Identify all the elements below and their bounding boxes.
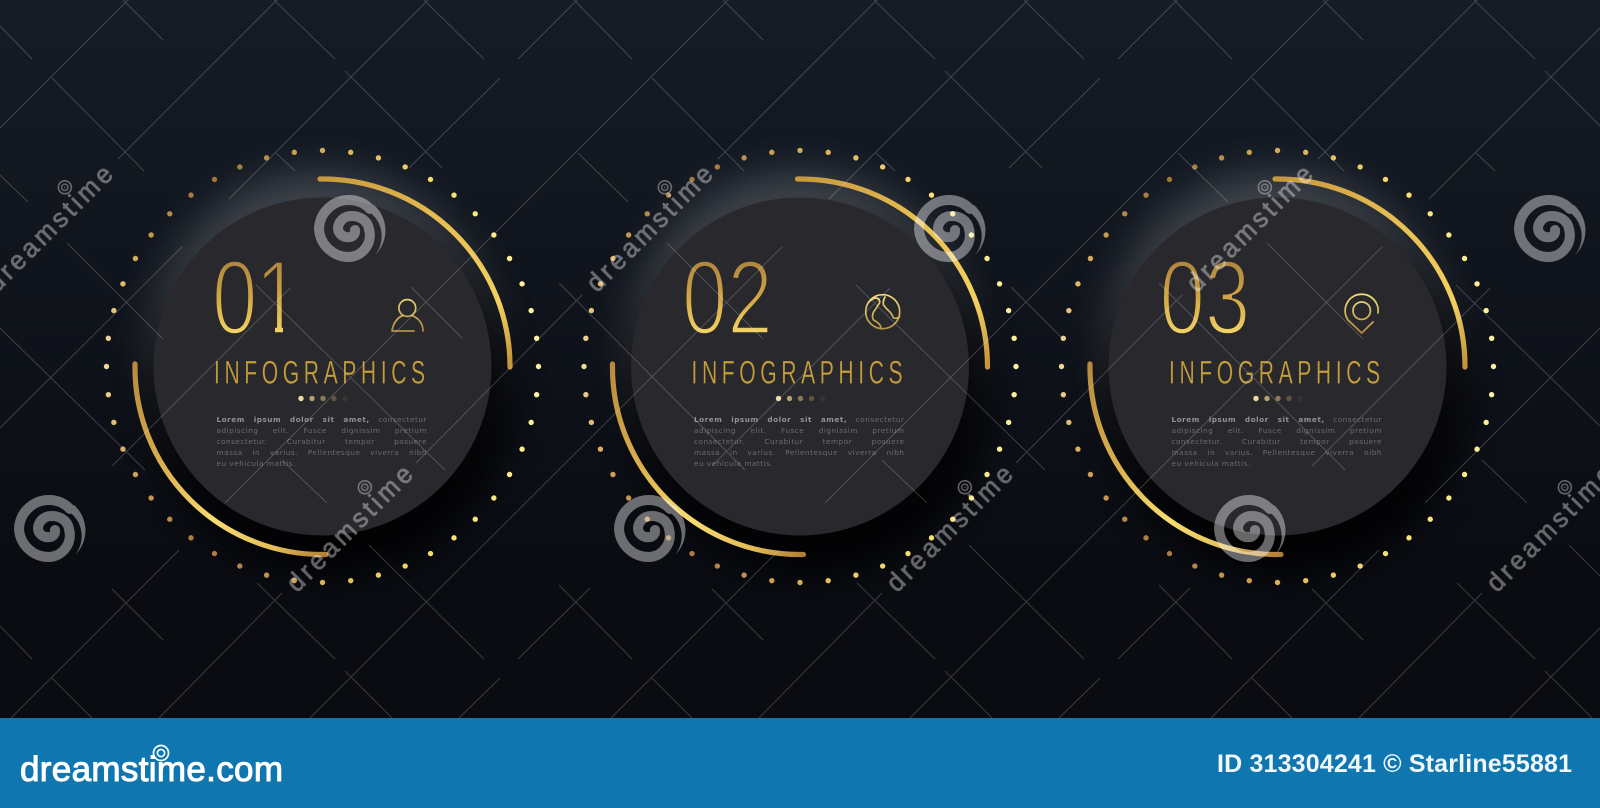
gold arc upper right [798,179,988,367]
drop shadow [632,216,988,572]
dotted ring [581,148,1019,585]
number 01: 01 [212,239,299,358]
pagination dots [1253,396,1303,401]
paragraph: consectetur. Curabitur tempor posuere [216,436,427,446]
drop shadow [1109,216,1465,572]
watermark words [0,152,1600,598]
paragraph: eu vehicula mattis. [216,458,296,468]
paragraph: eu vehicula mattis. [694,458,773,468]
paragraph: Lorem ipsum dolor sit amet, consectetur [1172,414,1382,424]
logo wordmark: dreamstime.com [20,750,283,789]
gold arc lower left [1090,364,1281,555]
panel: step 02 [581,148,1019,585]
top glow [160,180,484,504]
watermark spirals [19,200,1585,557]
disc [154,198,492,536]
watermark words: dreamstime [581,160,719,298]
heading: INFOGRAPHICS [1169,354,1385,391]
heading: INFOGRAPHICS [692,354,907,391]
footer banner [0,718,1600,808]
paragraph: consectetur. Curabitur tempor posuere [694,436,904,446]
paragraph: massa in varius. Pellentesque viverra nibh [694,448,904,456]
image id and credit: ID 313304241 © Starline55881 [1217,750,1572,778]
icon: globe [866,295,900,329]
dotted ring [1059,148,1496,585]
paragraph: adipiscing elit. Fusce dignissim pretium [694,426,904,434]
pagination dots [298,396,348,401]
disc [631,198,969,536]
icon: location pin [1345,294,1378,333]
paragraph [216,414,427,470]
gold arc lower left [135,364,326,555]
panel: step 01 [104,148,541,585]
icon: person [392,300,423,331]
gold arc upper right [1275,179,1465,367]
drop shadow [154,216,510,572]
paragraph [1172,414,1382,470]
watermark words: dreamstime [1181,160,1319,298]
logo spiral [154,746,168,760]
number 03: 03 [1160,239,1250,358]
top glow [638,180,962,504]
gold arc upper right [320,179,510,367]
heading: INFOGRAPHICS [214,354,430,391]
dotted ring [104,148,541,585]
paragraph: Lorem ipsum dolor sit amet, consectetur [694,414,904,424]
paragraph: eu vehicula mattis. [1172,458,1251,468]
paragraph: massa in varius. Pellentesque viverra nibh [216,448,427,456]
number 02: 02 [682,239,773,358]
paragraph: massa in varius. Pellentesque viverra nibh [1172,448,1382,456]
disc [1108,198,1446,536]
panel: step 03 [1059,148,1496,585]
gold arc lower left [612,364,804,555]
watermark words: dreamstime [281,460,419,598]
paragraph: adipiscing elit. Fusce dignissim pretium [1172,426,1382,434]
paragraph: adipiscing elit. Fusce dignissim pretium [216,426,427,434]
paragraph: consectetur. Curabitur tempor posuere [1172,436,1382,446]
watermark words: dreamstime [881,460,1019,598]
top glow [1115,180,1439,504]
paragraph [694,414,904,470]
pagination dots [776,396,825,401]
paragraph: Lorem ipsum dolor sit amet, consectetur [216,414,427,424]
